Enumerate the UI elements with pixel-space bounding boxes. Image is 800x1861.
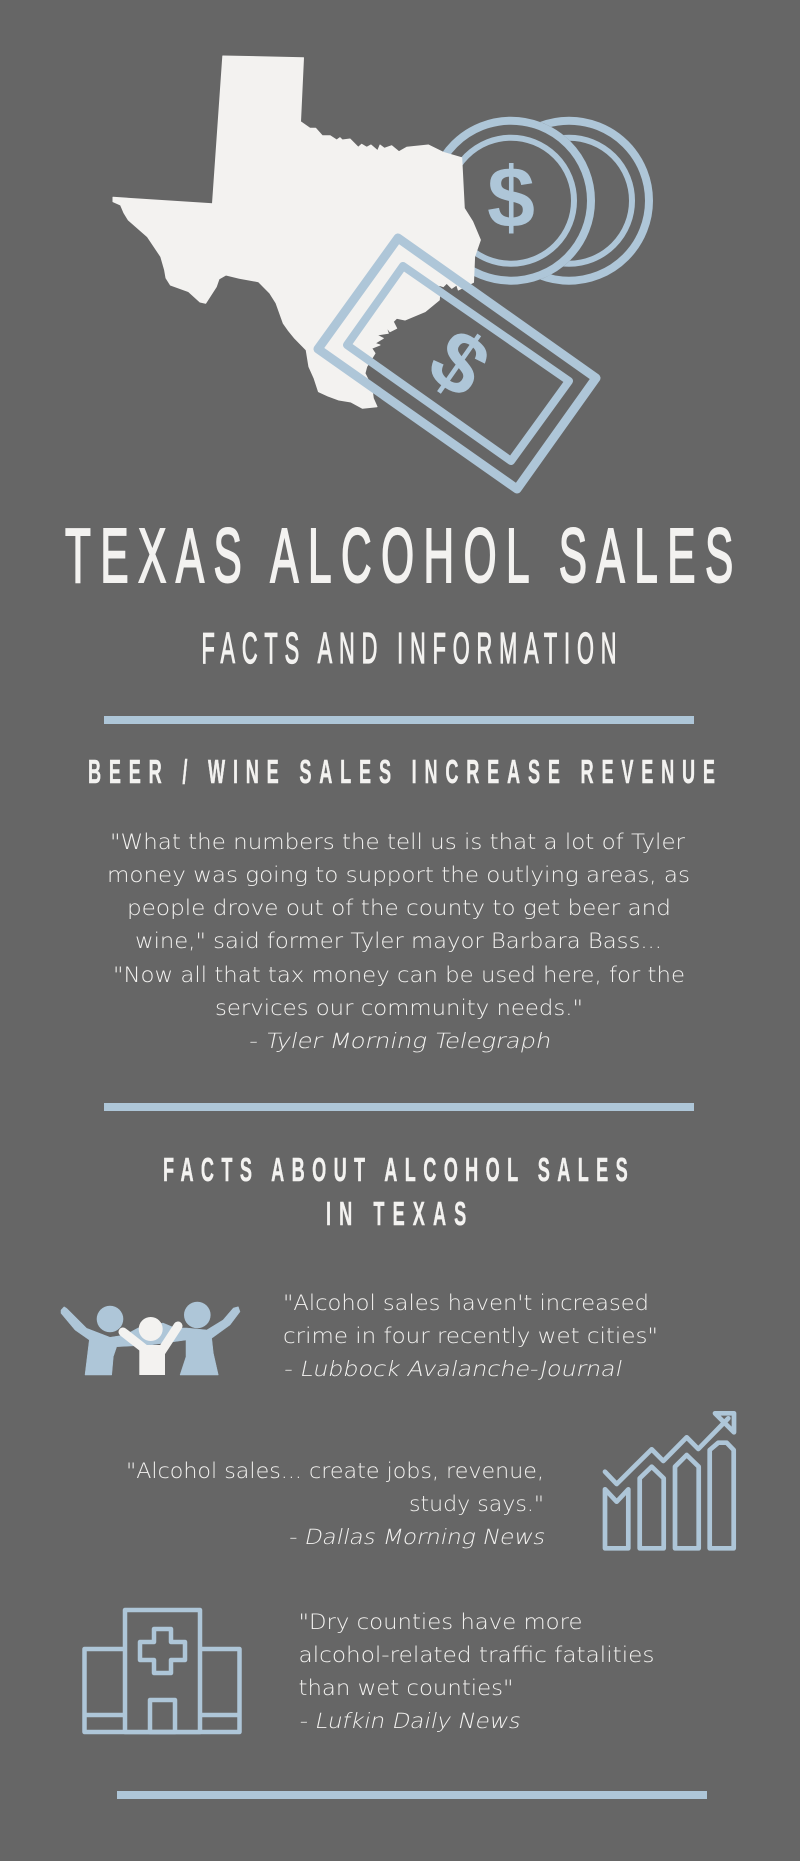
text block: Lufkin quote: alcohol-related traffic fatalities xyxy=(298,1643,654,1667)
heading: facts about alcohol sales in Texas: IN TEXAS xyxy=(326,1195,466,1232)
heading: facts about alcohol sales in Texas xyxy=(163,1151,628,1232)
heading: beer and wine revenue: BEER / WINE SALES INCREASE REVENUE xyxy=(88,753,715,790)
text block: Tyler quote xyxy=(107,830,690,1054)
text block: Tyler quote: money was going to support the outlying areas, as xyxy=(107,863,690,887)
text block: Dallas quote: "Alcohol sales... create jobs, revenue, xyxy=(126,1459,544,1483)
text block: Lubbock quote: - Lubbock Avalanche-Journal xyxy=(282,1357,625,1382)
icon: rising bar chart with arrow xyxy=(605,1413,734,1548)
hero illustration: Texas with coins and banknote xyxy=(113,56,649,489)
text block: Lubbock quote: crime in four recently wet cities" xyxy=(283,1324,658,1348)
text block: Tyler quote: "What the numbers the tell us is that a lot of Tyler xyxy=(110,830,685,854)
map: Texas silhouette xyxy=(113,56,480,408)
icon: two coins xyxy=(427,117,649,285)
icon: banknote xyxy=(318,238,596,489)
icon: hospital xyxy=(84,1610,240,1732)
text block: Lufkin quote: - Lufkin Daily News xyxy=(297,1709,523,1734)
divider 3 xyxy=(117,1791,707,1799)
text block: Dallas quote xyxy=(126,1459,548,1550)
text block: Lubbock quote xyxy=(282,1291,658,1382)
text block: Tyler quote: "Now all that tax money can be used here, for the xyxy=(113,963,685,987)
text block: Tyler quote: people drove out of the county to get beer and xyxy=(127,896,671,920)
divider 1 xyxy=(104,716,694,724)
text block: Tyler quote: - Tyler Morning Telegraph xyxy=(247,1029,554,1054)
text block: Lufkin quote: than wet counties" xyxy=(298,1676,514,1700)
text block: Lufkin quote xyxy=(297,1610,654,1734)
text block: Tyler quote: wine," said former Tyler mayor Barbara Bass... xyxy=(135,929,662,953)
title: TEXAS ALCOHOL SALES xyxy=(65,514,733,599)
heading: facts about alcohol sales in Texas: FACTS ABOUT ALCOHOL SALES xyxy=(163,1151,628,1188)
icon: two coins: $ xyxy=(487,150,535,246)
text block: Lubbock quote: "Alcohol sales haven't increased xyxy=(283,1291,649,1315)
text block: Lufkin quote: "Dry counties have more xyxy=(298,1610,582,1634)
text block: Dallas quote: study says." xyxy=(409,1492,544,1516)
text block: Tyler quote: services our community needs." xyxy=(215,996,583,1020)
text block: Dallas quote: - Dallas Morning News xyxy=(287,1525,548,1550)
icon: banknote: $ xyxy=(412,310,506,416)
divider 2 xyxy=(104,1103,694,1111)
icon: family with raised arms xyxy=(61,1302,240,1375)
subtitle: FACTS AND INFORMATION xyxy=(202,625,616,673)
